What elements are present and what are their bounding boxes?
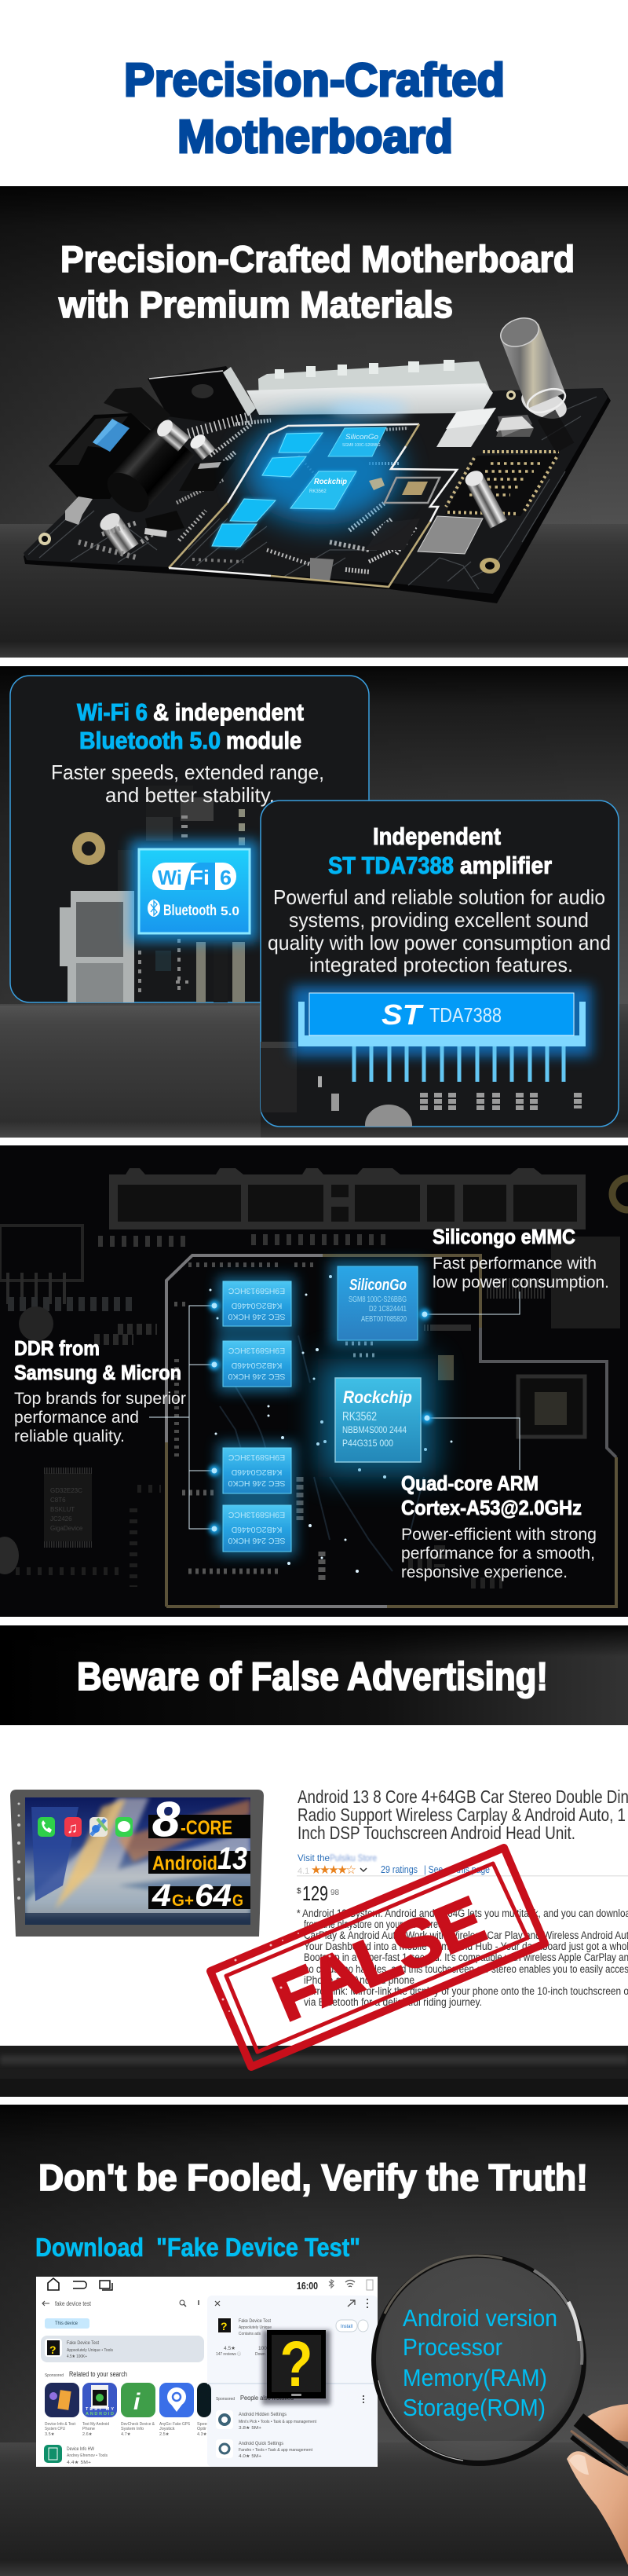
heading: ST TDA7388 [328,852,454,879]
description: systems, providing excellent sound [289,908,589,932]
dim connector [109,1168,586,1229]
panel: motherboard hero [0,186,628,658]
left search column [41,2300,204,2378]
hand: finger behind handle [586,2404,628,2442]
label: Quad-core ARM: performance for a smooth, [401,1545,595,1563]
left search column: This device [55,2321,78,2326]
chip: TDA7388 [292,986,592,1082]
DDR chip 1 [223,1281,291,1326]
app labels: 4.3★ [197,2431,207,2437]
app labels: DevCheck Device & [121,2422,155,2427]
DDR chip 2: SEC 246 HCK0 [228,1372,285,1381]
small SMD components [78,420,416,572]
label: Silicongo eMMC: low power consumption. [433,1273,609,1292]
chip glow on board [212,433,356,547]
price: 129 [302,1882,328,1905]
price: $ [297,1887,301,1896]
app icons row: i [133,2389,141,2415]
title [124,54,505,163]
DDR chip 4: E9H58913HCC [228,1510,285,1519]
screen buttons [17,1802,20,1900]
app labels: AnyGo: Fake GPS [159,2422,190,2427]
glowing blue area [243,418,400,525]
banner: false advertising [0,1625,628,1725]
label: DDR: Top brands for superior [14,1390,186,1408]
right detail column: 4.5★ [224,2345,236,2351]
Rockchip glow [318,1359,436,1477]
store link and rating [297,1852,628,1877]
right detail column: Install [341,2324,352,2329]
Device Info HW row: Andrey Efremov • Tools [67,2453,108,2458]
blue memory chips on board [212,433,323,547]
lens spec list: Processor [403,2333,502,2361]
heading: premium materials: Precision-Crafted Motherboard [60,238,575,280]
heading: Beware of False Advertising! [77,1654,548,1698]
label: Quad-core ARM: responsive experience. [401,1563,568,1581]
right detail column: 100 [258,2346,267,2351]
subheading: download: Download "Fake Device Test" [35,2233,360,2262]
heading: Independent [373,823,501,850]
SiliconGo chip: D2 1C824441 [369,1305,407,1314]
heading: Don't be Fooled, Verify the Truth! [38,2156,588,2198]
right detail column: Contains ads [239,2332,261,2336]
label: DDR [14,1336,186,1446]
label: Silicongo eMMC: Silicongo eMMC [433,1225,575,1248]
badge: 4G+64G: 64 [195,1878,232,1913]
chip: Wi-Fi 6 badge: 6 [220,866,232,889]
app labels: Test My Android [82,2422,109,2427]
capacitors [38,417,216,556]
status bar: 16:00 [297,2280,318,2292]
product description: from the playstore on your car stereo. [304,1918,445,1930]
app labels [45,2422,207,2435]
SiliconGo chip [338,1266,418,1340]
Rockchip chip [335,1378,421,1462]
card: TDA7388 amplifier [261,801,619,1145]
IC blocks [144,460,420,581]
right detail column: 4.0★ 5M+ [239,2453,261,2459]
label: DDR: reliable quality. [14,1427,125,1446]
board outline [166,1255,616,1607]
store link and rating: 4.1 [298,1867,309,1876]
right detail column [207,2299,378,2459]
DDR chip 3 [223,1448,291,1493]
stamp: FALSE: FALSE [264,1882,495,2036]
left search column: Sponsored [45,2373,64,2378]
description: Faster speeds, extended range, [51,760,324,784]
heading [77,698,304,754]
Device Info HW row: Device Info HW [67,2446,95,2452]
chip: Wi-Fi 6 badge: Wi [158,866,182,889]
badge: Android 13 [148,1841,250,1876]
amplifier pcb art [261,1042,582,1127]
app labels: Device Info & Test: [45,2422,76,2427]
app labels: Spee [197,2422,207,2427]
heading: & independent [153,698,304,726]
blue Rockchip chip on board [290,471,356,509]
callout dots [209,1300,433,1534]
panel: wireless and amplifier [0,666,628,1145]
screenshot: app store [36,2277,378,2467]
panel: processor and memory [0,1145,628,1617]
antenna knob [497,313,571,448]
title: Motherboard [177,111,453,163]
heading: premium materials: with Premium Materials [58,284,453,325]
DDR chip 3: SEC 246 HCK0 [228,1479,285,1488]
product description: via Bluetooth for a delightful riding journey. [304,1996,482,2008]
app labels: System Info [121,2427,144,2431]
Rockchip chip: RK3562 [342,1410,377,1424]
label: Silicongo eMMC: Fast performance with [433,1255,597,1273]
label: Quad-core ARM [401,1471,597,1581]
badge: 8-core: -CORE [181,1817,232,1839]
heading: amplifier [460,852,552,879]
badge: 8-core [148,1793,250,1847]
chip: TDA7388: ST [382,999,424,1031]
Device Info HW row: 4.4★ 5M+ [67,2460,91,2465]
description: Powerful and reliable solution for audio [273,885,605,909]
product title: Inch DSP Touchscreen Android Head Unit. [298,1823,575,1843]
board outline traces [169,424,457,587]
price: 98 [330,1889,340,1897]
power connector [49,387,170,499]
status bar [48,2278,373,2292]
heading: Bluetooth 5.0 [79,727,221,754]
SiliconGo chip: AEBT007085820 [361,1315,407,1324]
description: integrated protection features. [309,953,573,977]
badge: 4G+64G: G+ [172,1892,194,1910]
left search column: ? [49,2343,57,2356]
DDR chip 4 [223,1505,291,1552]
product title [298,1786,628,1843]
silver shield [418,416,534,554]
description: quality with low power consumption and [268,931,611,955]
blue SiliconGo chip on board: SiliconGo [345,433,378,441]
Device Info HW row [44,2445,108,2465]
dark strip below listing [0,2046,628,2097]
white header connector [246,360,496,447]
chip glows [217,1261,424,1556]
magnifying glass [369,2254,628,2481]
heading [328,823,552,879]
badge: Android 13: 13 [217,1841,247,1876]
right detail column: Fake Device Test [239,2318,271,2324]
description [51,760,324,807]
chip: Wi-Fi 6 badge: Fi [189,866,210,889]
lens spec list: Android version [403,2304,557,2332]
Rockchip chip: Rockchip [343,1387,412,1407]
left search column: Related to your search [69,2370,127,2378]
app icons row [45,2383,211,2417]
floor lightening [0,1006,261,1138]
right detail column: Mini's Pick • Tools • Task & app management [239,2420,316,2424]
app labels: Joystick [159,2427,175,2431]
label: Quad-core ARM: Cortex-A53@2.0GHz [401,1496,582,1519]
app labels: 4.7★ [121,2431,131,2437]
lens spec list: Storage(ROM) [403,2394,546,2421]
heading: module [226,727,301,754]
badge: 4G+64G: 4 [152,1878,171,1913]
label: DDR: performance and [14,1409,139,1427]
blue SiliconGo chip on board: SGM8 100C-S26BBG [342,443,381,448]
right detail column: Android Quick Settings [239,2441,284,2446]
DDR chip 2 [223,1341,291,1387]
gold chip [369,478,440,503]
heading: premium materials [58,244,573,319]
DDR chip 1: E9H58913HCC [228,1286,285,1295]
blue Rockchip chip on board: Rockchip [314,478,347,486]
right detail column: 3.8★ 5M+ [239,2425,261,2431]
dim pcb details: GigaDevice [50,1525,83,1532]
icon: question mark tablet: ? [279,2329,312,2400]
title: Precision-Crafted [124,54,505,106]
product description: iPhone and Android phone [304,1974,414,1986]
left search column: 4.5★ 100K+ [67,2354,87,2359]
blue Rockchip chip on board: RK3562 [309,489,327,494]
store link and rating: Visit the [298,1852,330,1863]
label: Quad-core ARM: Quad-core ARM [401,1471,539,1495]
panel: fake listing [10,1786,628,2008]
DDR chip 1: SEC 246 HCK0 [228,1312,285,1321]
icon: question mark tablet [262,2329,330,2405]
DDR chip 2: K4B2G0446D [231,1361,282,1370]
badge: 8-core: 8 [152,1793,181,1847]
app icons row: TEST MY [86,2407,114,2412]
product photo: head unit [10,1790,264,1937]
left search column: fake device test [55,2300,92,2307]
lens spec list: Memory(RAM) [403,2364,547,2391]
blue SiliconGo chip on board [328,427,386,456]
right detail column: Android Hidden Settings [239,2412,287,2417]
right detail column: 147 reviews ⓘ [216,2351,241,2357]
gold pad module [445,452,560,516]
label: DDR: DDR from [14,1336,100,1360]
dim pcb details: GD32E23C [50,1487,82,1494]
DDR chip 2: E9H58913HCC [228,1346,285,1355]
DDR chip 3: K4B2G0446D [231,1468,282,1477]
app icons row: ANDROID [86,2412,114,2417]
dim pcb details: JC2426 [50,1515,72,1523]
app labels: Phone [82,2427,95,2431]
app labels: 3.5★ [45,2431,55,2437]
label: DDR: Samsung & Micron [14,1361,181,1384]
Rockchip chip: NBBM4S000 2444 [342,1424,407,1435]
label: Silicongo eMMC [433,1225,609,1292]
chip: TDA7388: TDA7388 [429,1003,502,1027]
black box component [148,366,257,434]
lens floor reflection [418,2441,540,2461]
right detail column: ? [221,2320,228,2332]
right detail column: People also installed [240,2394,294,2402]
DDR chip 1: K4B2G0446D [231,1301,282,1310]
store link and rating: 29 ratings [381,1863,418,1875]
panel: verify the truth [0,2105,628,2576]
store link and rating: ★★★★☆ [311,1863,356,1877]
chip: Wi-Fi 6 badge [130,841,258,942]
app labels: System CPU [45,2427,65,2431]
Rockchip chip: P44G315 000 [342,1438,393,1449]
description: and better stability. [105,783,275,807]
card pcb art [60,786,245,1002]
right detail column: Sponsored [216,2397,235,2402]
left search column: Fake Device Test [67,2340,99,2346]
app labels: 2.5★ [159,2431,170,2437]
motherboard illustration [24,313,611,603]
scattered points [209,1275,452,1573]
product description [297,1907,628,2008]
card: Wi-Fi and Bluetooth [10,676,369,1002]
store link and rating: Pulsiku Store [330,1852,377,1863]
CarPlay app icons: ♫ [67,1820,78,1837]
badge: Android 13: Android [152,1852,217,1874]
dim pcb details [0,1178,628,1587]
left search column: Appsolutely Unique • Tools [67,2348,113,2353]
chip: Wi-Fi 6 badge: Bluetooth [163,903,217,919]
store link and rating: | See on this page [424,1863,490,1875]
dim pcb details: BSKLUT [50,1506,75,1513]
DDR chip 4: SEC 246 HCK0 [228,1536,285,1545]
app labels: Optir [197,2427,206,2431]
right detail column: Appsolutely Unique [239,2325,272,2330]
callout lines [149,1292,520,1529]
lens spec list [403,2304,557,2421]
right detail column: Down [255,2352,265,2357]
SiliconGo chip: SiliconGo [349,1277,407,1294]
app labels: 2.6★ [82,2431,93,2437]
chip: Wi-Fi 6 badge: 5.0 [221,905,239,918]
DDR chip 4: K4B2G0446D [231,1525,282,1534]
badge: 4G+64G [148,1878,250,1913]
badge: 4G+64G: G [232,1892,243,1910]
right detail column: Fandro • Tools • Task & app management [239,2448,312,2453]
dim pcb details: C8T6 [50,1497,66,1504]
heading: Wi-Fi 6 [77,698,148,726]
SiliconGo chip: SGM8 100C-S26BBG [349,1295,407,1304]
label: Quad-core ARM: Power-efficient with strong [401,1526,597,1544]
description [268,885,611,977]
mounting hole [480,558,500,573]
silver standoff [465,471,507,529]
CarPlay app icons [38,1817,133,1837]
DDR chip 3: E9H58913HCC [228,1453,285,1462]
hand: thumb and palm [567,2451,628,2565]
stamp: FALSE [210,1848,545,2067]
